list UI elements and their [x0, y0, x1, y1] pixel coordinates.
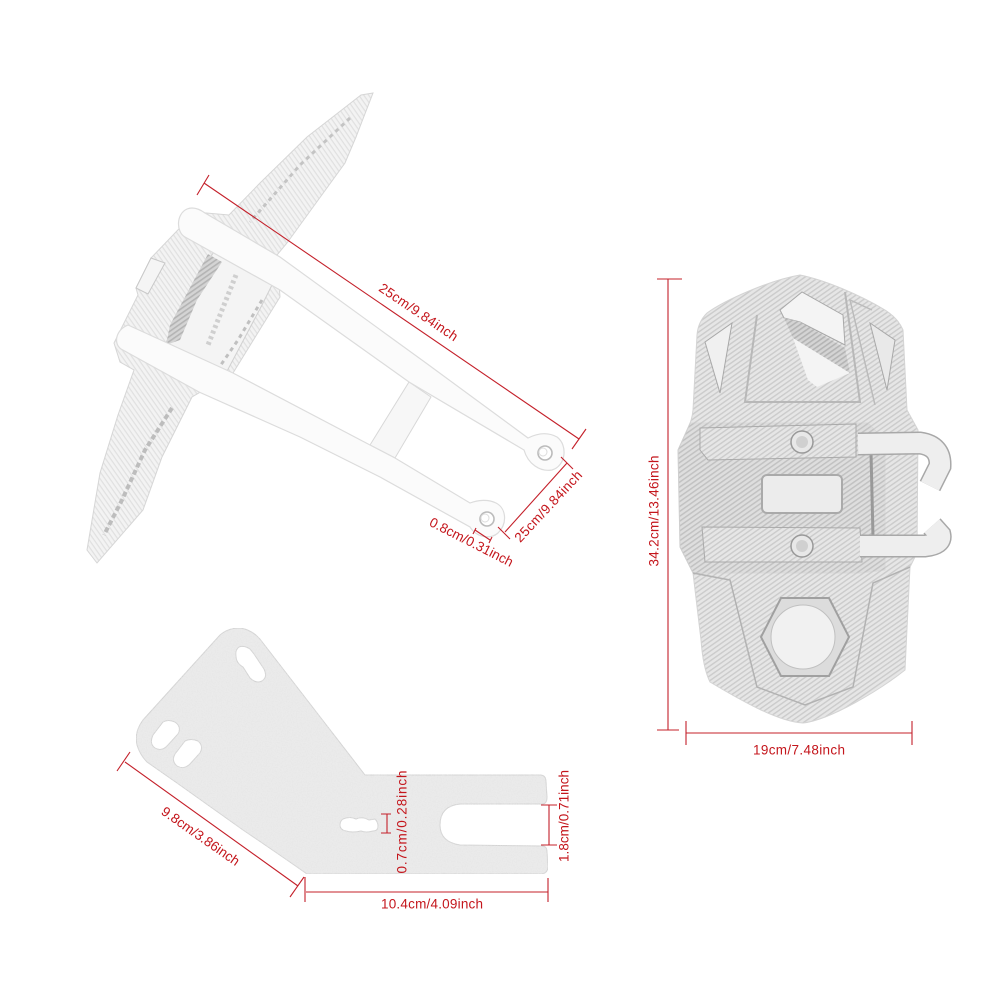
- dimension: arm length: 25cm/9.84inch: [376, 280, 461, 344]
- mounting tab: [136, 258, 165, 294]
- fender blade: [87, 93, 373, 563]
- dimension: plate width: [305, 877, 548, 912]
- panel: flat mounting plate: [136, 628, 548, 874]
- dimension: slot hole: [381, 770, 410, 874]
- dimension: plate diagonal: [117, 752, 304, 897]
- lower arm: [117, 325, 505, 537]
- dimension: plate width: 10.4cm/4.09inch: [381, 897, 483, 912]
- upper bolt: [791, 431, 813, 453]
- dimension: arm spacing: 25cm/9.84inch: [511, 468, 585, 545]
- upper bracket: [700, 424, 856, 460]
- reflector: [762, 475, 842, 513]
- dimension: total height: [647, 279, 682, 730]
- lower arm tube: [860, 526, 940, 546]
- dimension: slot hole: 0.7cm/0.28inch: [395, 770, 410, 874]
- hex nut: [761, 598, 849, 676]
- lower arm eyelet: [480, 512, 494, 526]
- dimension: fork gap: [541, 770, 572, 862]
- centre mount plate: [678, 423, 885, 573]
- upper arm: [178, 208, 564, 470]
- cross strut: [370, 382, 431, 458]
- dimension: eyelet hole: 0.8cm/0.31inch: [427, 515, 516, 570]
- upper arm eyelet: [538, 446, 552, 460]
- dimension: plate diagonal: 9.8cm/3.86inch: [159, 804, 243, 869]
- fender body: [678, 275, 918, 723]
- panel: side view of fender with support arms: [87, 93, 564, 563]
- lower bolt: [791, 535, 813, 557]
- dimension: fork gap: 1.8cm/0.71inch: [557, 770, 572, 862]
- dimension: total width: 19cm/7.48inch: [753, 743, 845, 758]
- dimension: arm length: [197, 175, 586, 449]
- dimension: total height: 34.2cm/13.46inch: [647, 456, 662, 566]
- lower panel lines: [693, 567, 910, 705]
- vertical strut: [871, 452, 873, 537]
- upper window cut-outs: [705, 292, 895, 405]
- lower bracket: [702, 527, 862, 562]
- panel: front view of fender: [678, 275, 940, 723]
- dimension: total width: [686, 721, 912, 758]
- upper arm tube: [858, 443, 940, 486]
